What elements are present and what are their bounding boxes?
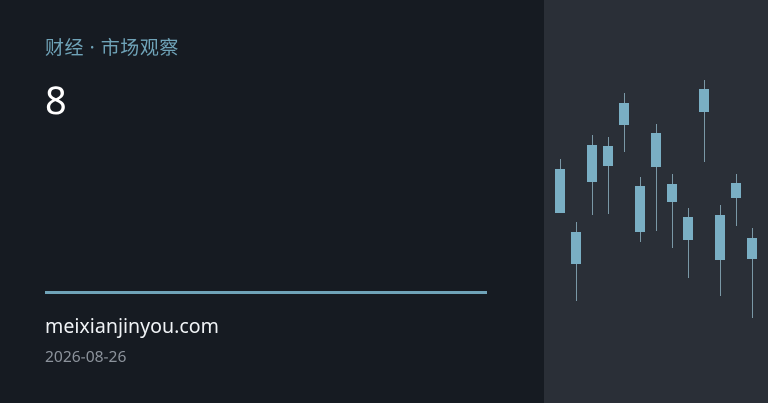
category heading: 财经 · 市场观察 xyxy=(45,34,179,60)
panel: left background xyxy=(0,0,544,403)
main number: 8 xyxy=(45,74,67,126)
panel: candlestick chart xyxy=(544,0,768,403)
date: 2026-08-26 xyxy=(45,345,126,367)
accent rule xyxy=(45,291,487,294)
site name: meixianjinyou.com xyxy=(45,312,219,339)
